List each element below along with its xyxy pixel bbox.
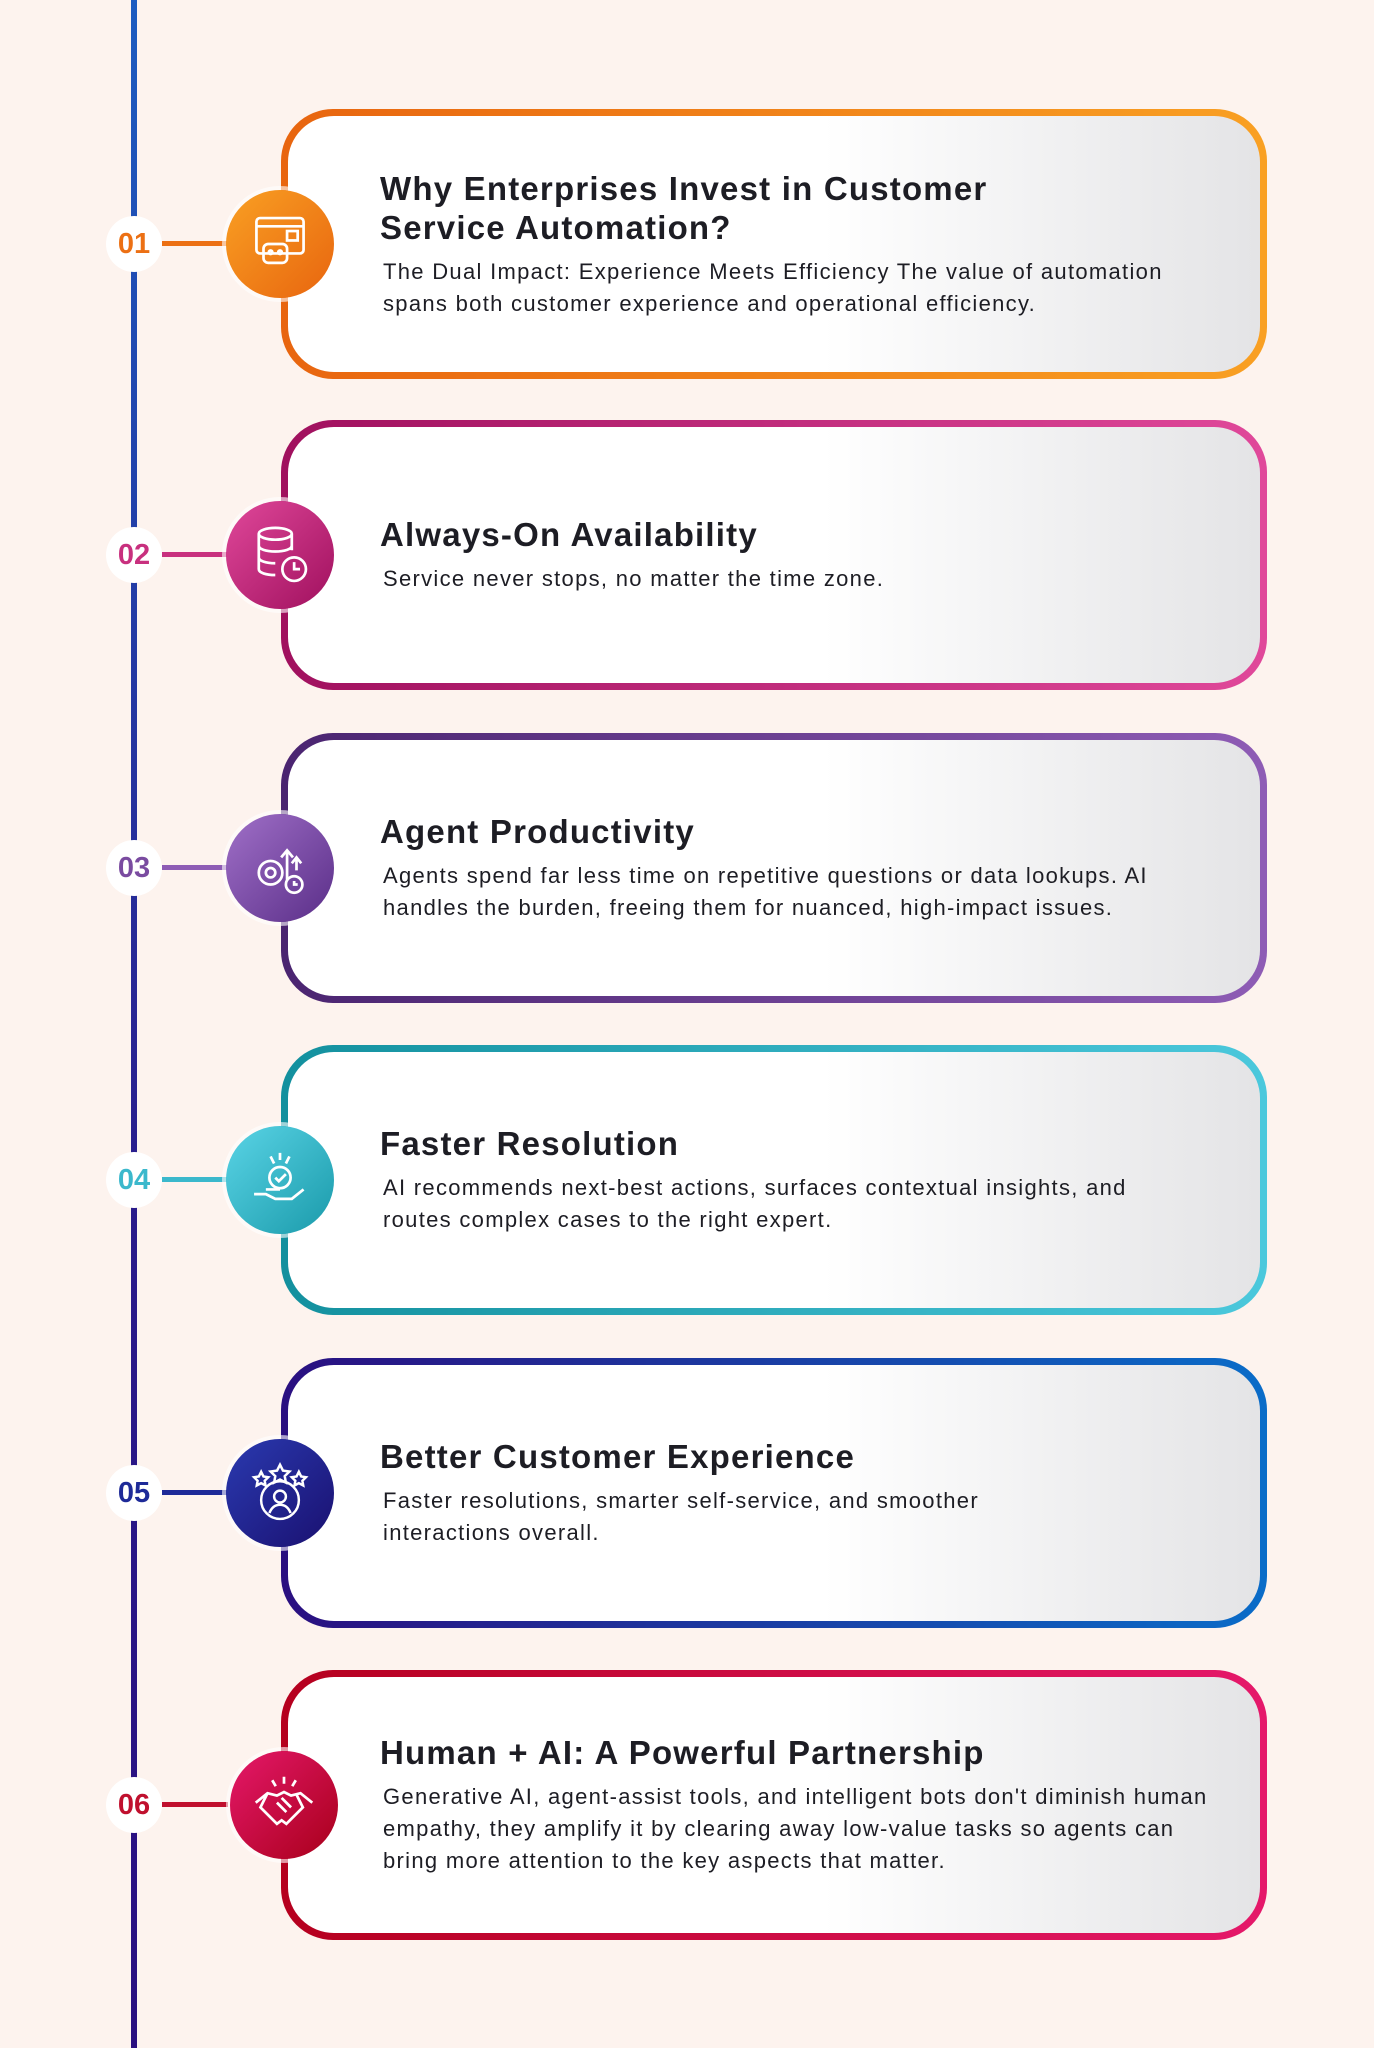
number 04 [106,1152,162,1208]
item 03 [106,733,1267,1003]
icon: stars user [226,1439,334,1547]
body 04: AI recommends next-best actions, surfaces contextual insights, and [383,1175,1127,1200]
timeline line [131,0,137,2048]
body 04 [383,1175,1127,1232]
body 03: Agents spend far less time on repetitive questions or data lookups. AI [383,863,1148,888]
connector 04 [162,1177,228,1182]
number 06 [106,1777,162,1833]
item 02 [106,420,1267,690]
number 03: 03 [118,852,150,884]
icon: hand check [226,1126,334,1234]
card 03 [281,733,1267,1003]
item 06 [106,1670,1267,1940]
number 02 [106,527,162,583]
title 01: Why Enterprises Invest in Customer [380,170,987,206]
card 06 [281,1670,1267,1940]
body 03: handles the burden, freeing them for nuanced, high-impact issues. [383,895,1113,920]
body 01 [383,258,1163,316]
body 05: Faster resolutions, smarter self-service, and smoother [383,1488,979,1513]
body 05 [383,1488,979,1545]
number 05: 05 [118,1476,150,1508]
icon: handshake [230,1751,338,1859]
body 06: Generative AI, agent-assist tools, and intelligent bots don't diminish human [383,1784,1208,1809]
body 03 [383,863,1148,920]
card 02 [281,420,1267,690]
body 06: empathy, they amplify it by clearing away low-value tasks so agents can [383,1816,1174,1841]
card 01 [281,109,1267,379]
body 06: bring more attention to the key aspects that matter. [383,1848,946,1873]
icon: database clock [226,501,334,609]
connector 01 [162,241,228,246]
body 02: Service never stops, no matter the time zone. [383,566,884,591]
item 04 [106,1045,1267,1315]
number 03 [106,840,162,896]
body 01: spans both customer experience and operational efficiency. [383,290,1036,316]
body 05: interactions overall. [383,1520,600,1545]
number 01 [106,216,162,272]
icon: chatbot [226,190,334,298]
title 06: Human + AI: A Powerful Partnership [380,1734,985,1771]
connector 05 [162,1490,228,1495]
number 01: 01 [118,228,150,260]
connector 06 [162,1802,228,1807]
card 05 [281,1358,1267,1628]
title 05: Better Customer Experience [380,1438,855,1475]
item 05 [106,1358,1267,1628]
title 04: Faster Resolution [380,1125,679,1162]
number 04: 04 [118,1164,150,1196]
number 05 [106,1465,162,1521]
body 06 [383,1784,1208,1873]
connector 03 [162,865,228,870]
body 01: The Dual Impact: Experience Meets Efficiency The value of automation [383,258,1163,284]
number 02: 02 [118,538,150,570]
title 01 [380,170,987,246]
body 04: routes complex cases to the right expert. [383,1207,832,1232]
icon: gear growth [226,814,334,922]
card 04 [281,1045,1267,1315]
title 01: Service Automation? [380,208,732,246]
title 02: Always-On Availability [380,516,758,553]
number 06: 06 [118,1788,150,1820]
item 01 [106,109,1267,379]
connector 02 [162,552,228,557]
title 03: Agent Productivity [380,813,695,850]
